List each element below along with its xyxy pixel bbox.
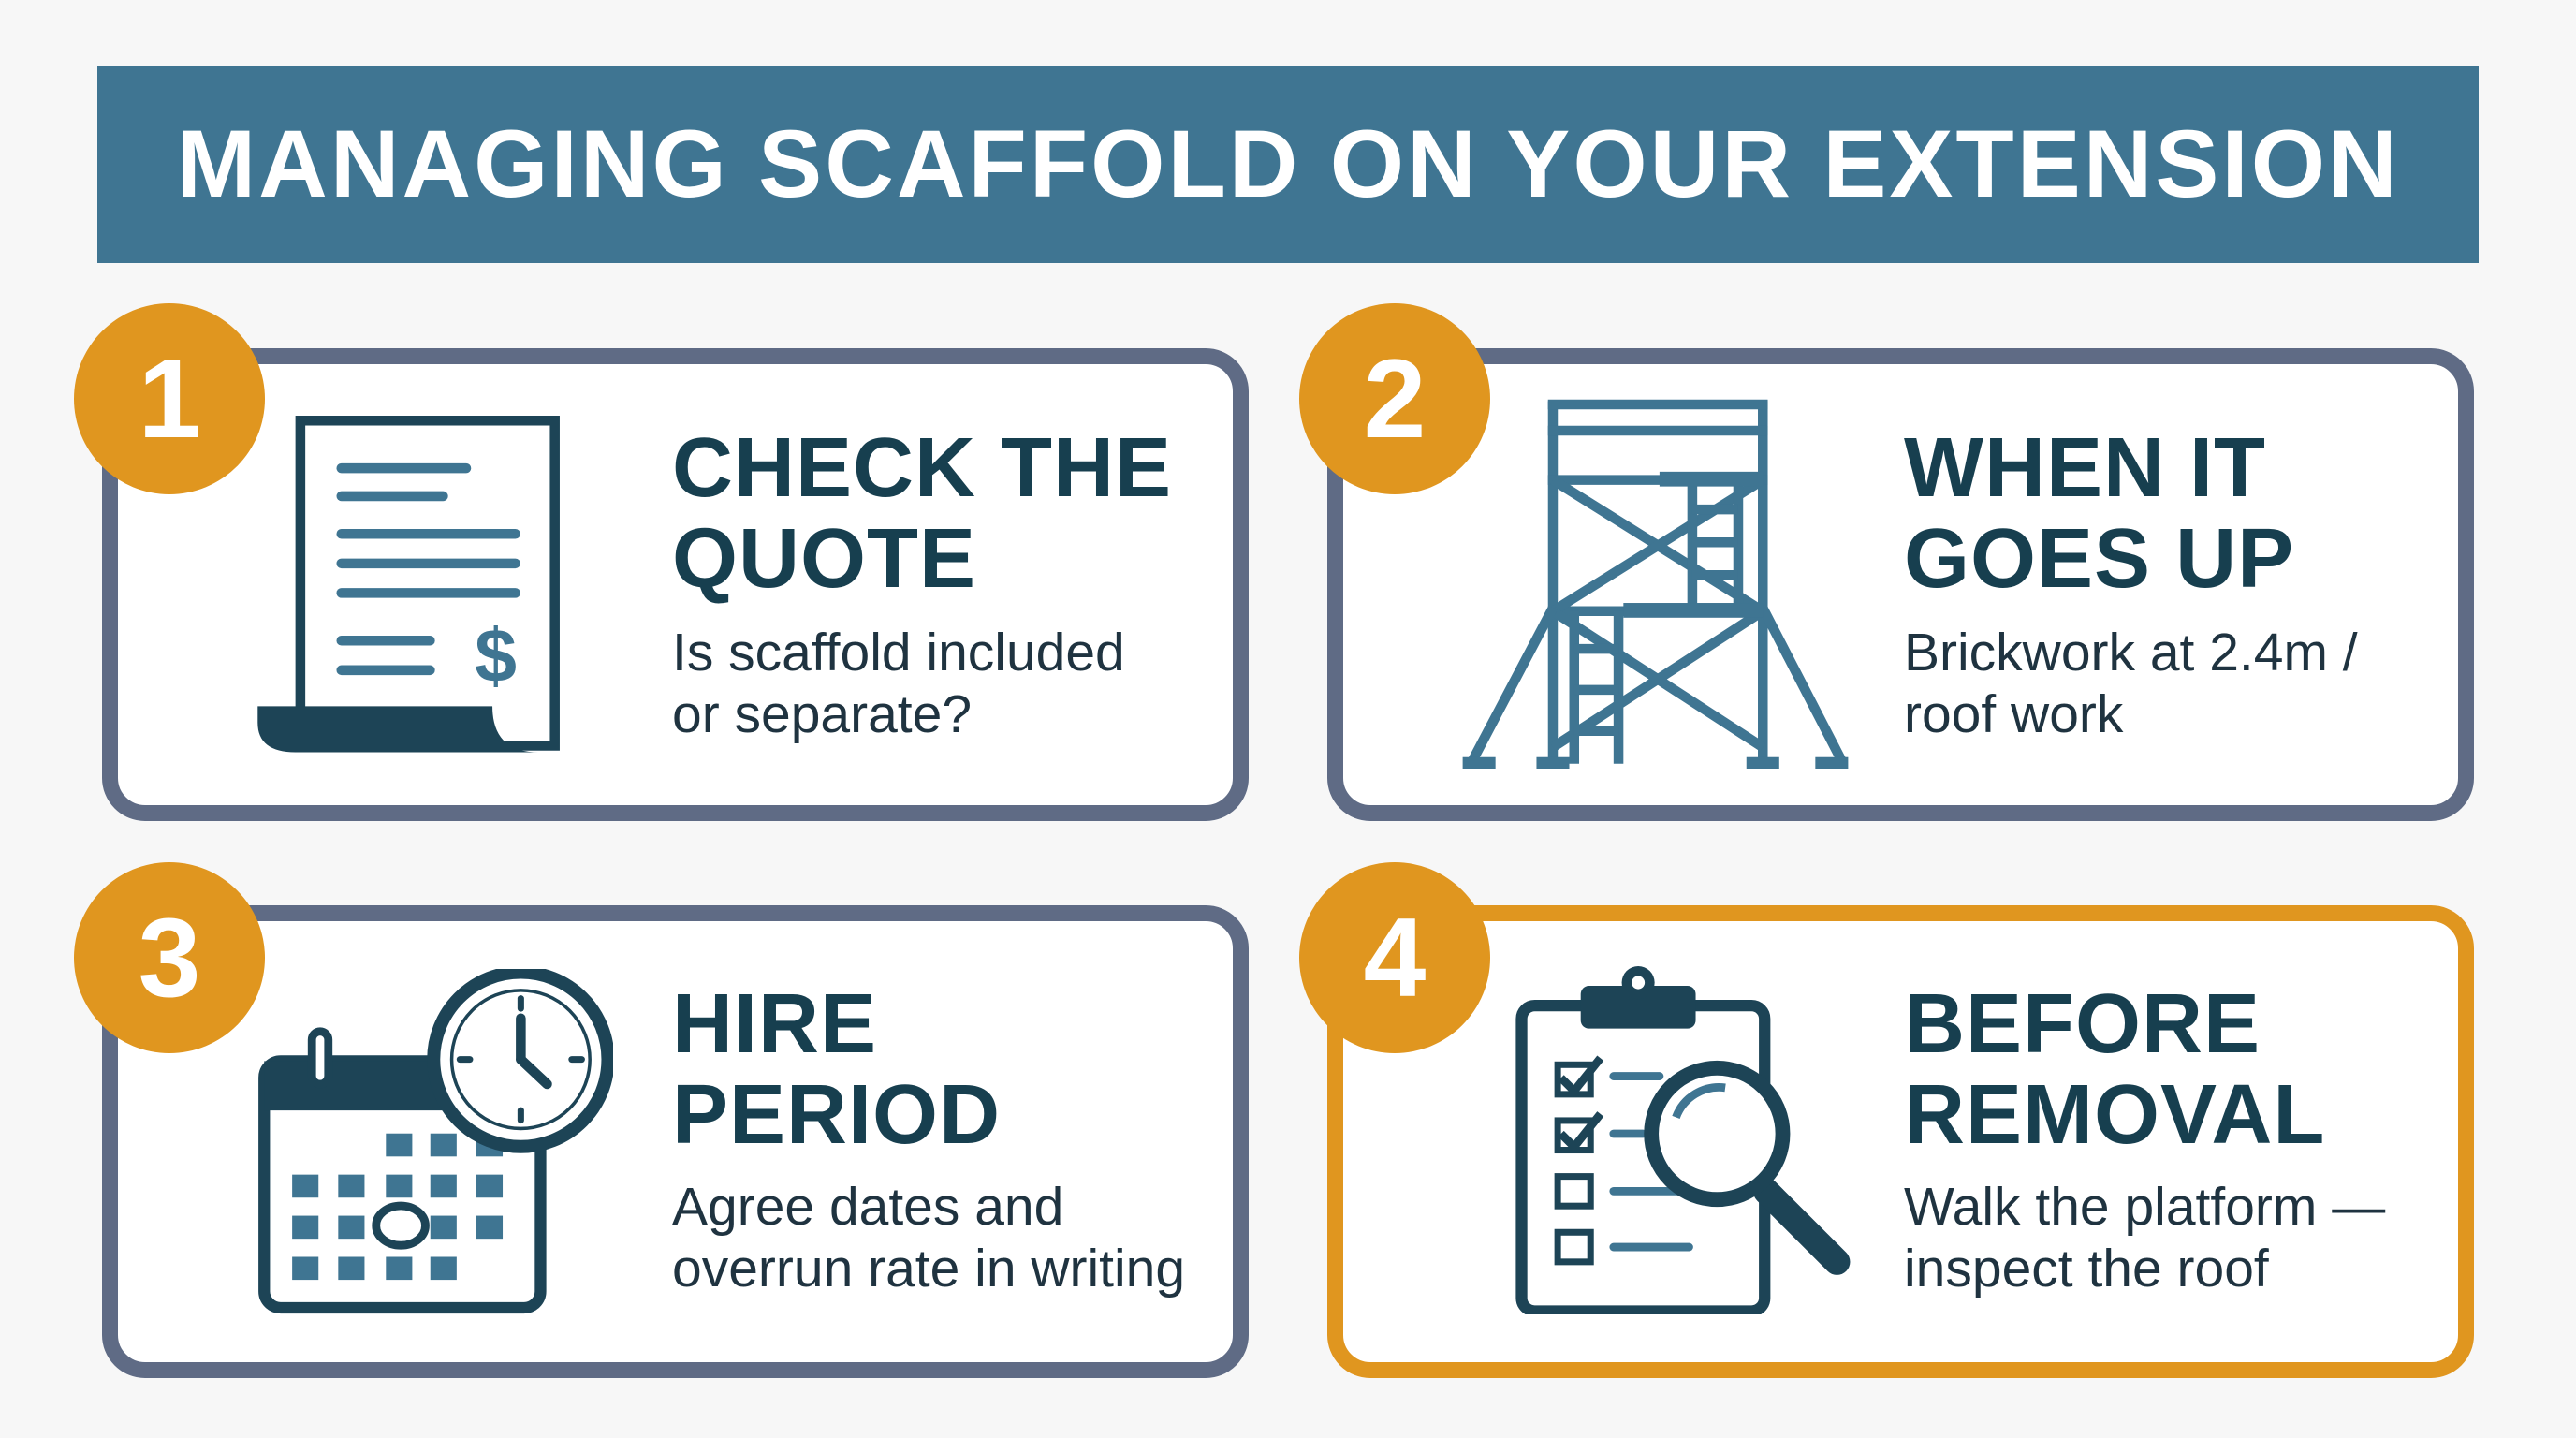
text: goes up: Brickwork at 2.4m / — [1904, 623, 2358, 682]
text: quote: Is scaffold included — [672, 623, 1125, 682]
number badge 2: 2 — [1364, 336, 1426, 462]
panel: before removal — [1327, 905, 2474, 1378]
number badge 1: 1 — [139, 336, 200, 462]
text: hire: overrun rate in writing — [672, 1239, 1185, 1299]
heading: before removal — [1904, 977, 2325, 1162]
panel: check the quote — [102, 348, 1249, 821]
text: goes up — [1904, 623, 2358, 744]
heading: hire period — [672, 977, 1001, 1162]
number badge 4 — [1299, 862, 1490, 1053]
number badge 2 — [1299, 303, 1490, 494]
title bar — [97, 66, 2479, 263]
title bar: MANAGING SCAFFOLD ON YOUR EXTENSION — [176, 110, 2400, 217]
text: removal: inspect the roof — [1904, 1239, 2269, 1299]
heading: check the quote — [672, 421, 1172, 606]
heading: before removal: BEFORE — [1904, 977, 2261, 1071]
text: hire — [672, 1177, 1185, 1299]
icon: scaffold tower — [1462, 399, 1848, 769]
heading: check the quote: QUOTE — [672, 512, 976, 606]
heading: check the quote: CHECK THE — [672, 421, 1172, 515]
heading: before removal: REMOVAL — [1904, 1068, 2325, 1162]
panel: hire period — [102, 905, 1249, 1378]
heading: when it goes up: WHEN IT — [1904, 421, 2266, 515]
text: quote — [672, 623, 1125, 744]
text: removal — [1904, 1177, 2385, 1299]
heading: hire period: PERIOD — [672, 1068, 1001, 1162]
number badge 1 — [74, 303, 265, 494]
panel: when it goes up — [1327, 348, 2474, 821]
heading: when it goes up — [1904, 421, 2294, 606]
number badge 3 — [74, 862, 265, 1053]
icon: calendar and clock — [258, 969, 613, 1314]
number badge 4: 4 — [1364, 895, 1426, 1020]
heading: when it goes up: GOES UP — [1904, 512, 2294, 606]
text: quote: or separate? — [672, 684, 972, 744]
text: removal: Walk the platform — — [1904, 1177, 2385, 1237]
icon: clipboard checklist with magnifier — [1515, 966, 1850, 1314]
heading: hire period: HIRE — [672, 977, 877, 1071]
icon: quote document — [257, 416, 560, 753]
number badge 3: 3 — [139, 895, 200, 1020]
text: goes up: roof work — [1904, 684, 2123, 744]
icon: quote document: $ — [475, 614, 517, 698]
text: hire: Agree dates and — [672, 1177, 1063, 1237]
